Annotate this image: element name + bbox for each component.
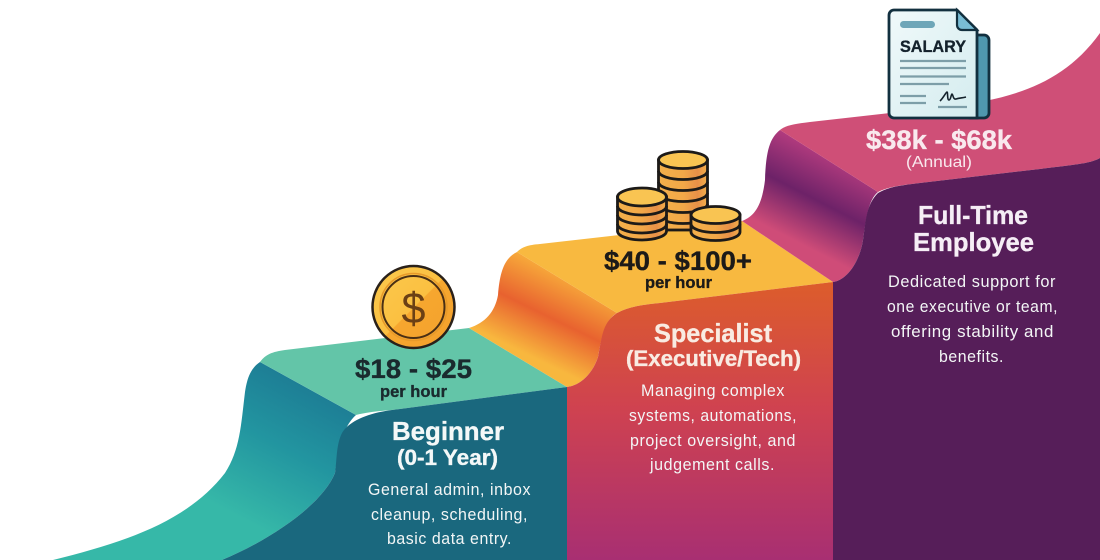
tall coin stack [658,152,708,230]
yellow top surface [517,221,833,313]
text: step 2 price [604,246,752,292]
teal curved riser [53,362,356,560]
text: beginner description: basic data entry. [387,529,512,548]
text: beginner description: cleanup, scheduling, [371,505,528,524]
text: beginner description [368,480,531,548]
document sheet [889,10,977,118]
text: specialist description: systems, automations, [629,406,797,425]
right coin stack [691,206,740,240]
text: step 1 price: per hour [380,382,447,401]
text: step 3 price [866,125,1013,171]
left coin stack [618,188,666,240]
text: full-time description: one executive or team, [887,297,1058,316]
text: step 3 price: (Annual) [906,154,972,171]
text: specialist description [629,381,797,474]
text: full-time description: Dedicated support for [888,272,1056,291]
text: step 3 price: $38k - $68k [866,125,1013,155]
step 2: specialist [469,221,833,560]
text: specialist description: project oversight, and [630,431,796,450]
heading: full-time employee [913,200,1034,257]
document lines [900,61,967,107]
icon: dollar coin: $ [402,284,426,333]
orange to magenta front panel [567,282,833,560]
orange curved riser [469,252,617,387]
pink top surface [780,33,1100,192]
heading: beginner: (0-1 Year) [397,445,498,470]
text: full-time description: benefits. [939,347,1004,366]
folded corner [957,10,977,30]
heading: specialist: Specialist [654,318,772,348]
salary label: SALARY [900,37,967,56]
icon: dollar coin [372,266,454,348]
text: step 1 price [355,354,472,401]
heading: beginner: Beginner [392,416,504,446]
title pill [900,21,935,28]
signature [940,92,966,101]
heading: beginner [392,416,504,470]
heading: specialist [626,318,801,371]
text: step 2 price: per hour [645,273,712,292]
purple curved riser [742,130,878,282]
text: step 1 price: $18 - $25 [355,354,472,384]
step 1: beginner [53,328,567,560]
heading: full-time employee: Employee [913,227,1034,257]
heading: specialist: (Executive/Tech) [626,346,801,371]
teal top surface [260,328,567,415]
heading: full-time employee: Full-Time [918,200,1028,230]
icon: coin stacks [618,152,740,240]
text: full-time description [887,272,1058,366]
text: beginner description: General admin, inbox [368,480,531,499]
dark teal front panel [222,387,567,560]
step 3: full-time employee [742,33,1100,560]
text: full-time description: offering stability and [891,322,1054,341]
text: specialist description: Managing complex [641,381,785,400]
icon: salary document [889,10,989,118]
text: step 2 price: $40 - $100+ [604,246,752,276]
dark purple front panel [833,158,1100,560]
text: specialist description: judgement calls. [649,455,775,474]
document back page [970,35,989,118]
